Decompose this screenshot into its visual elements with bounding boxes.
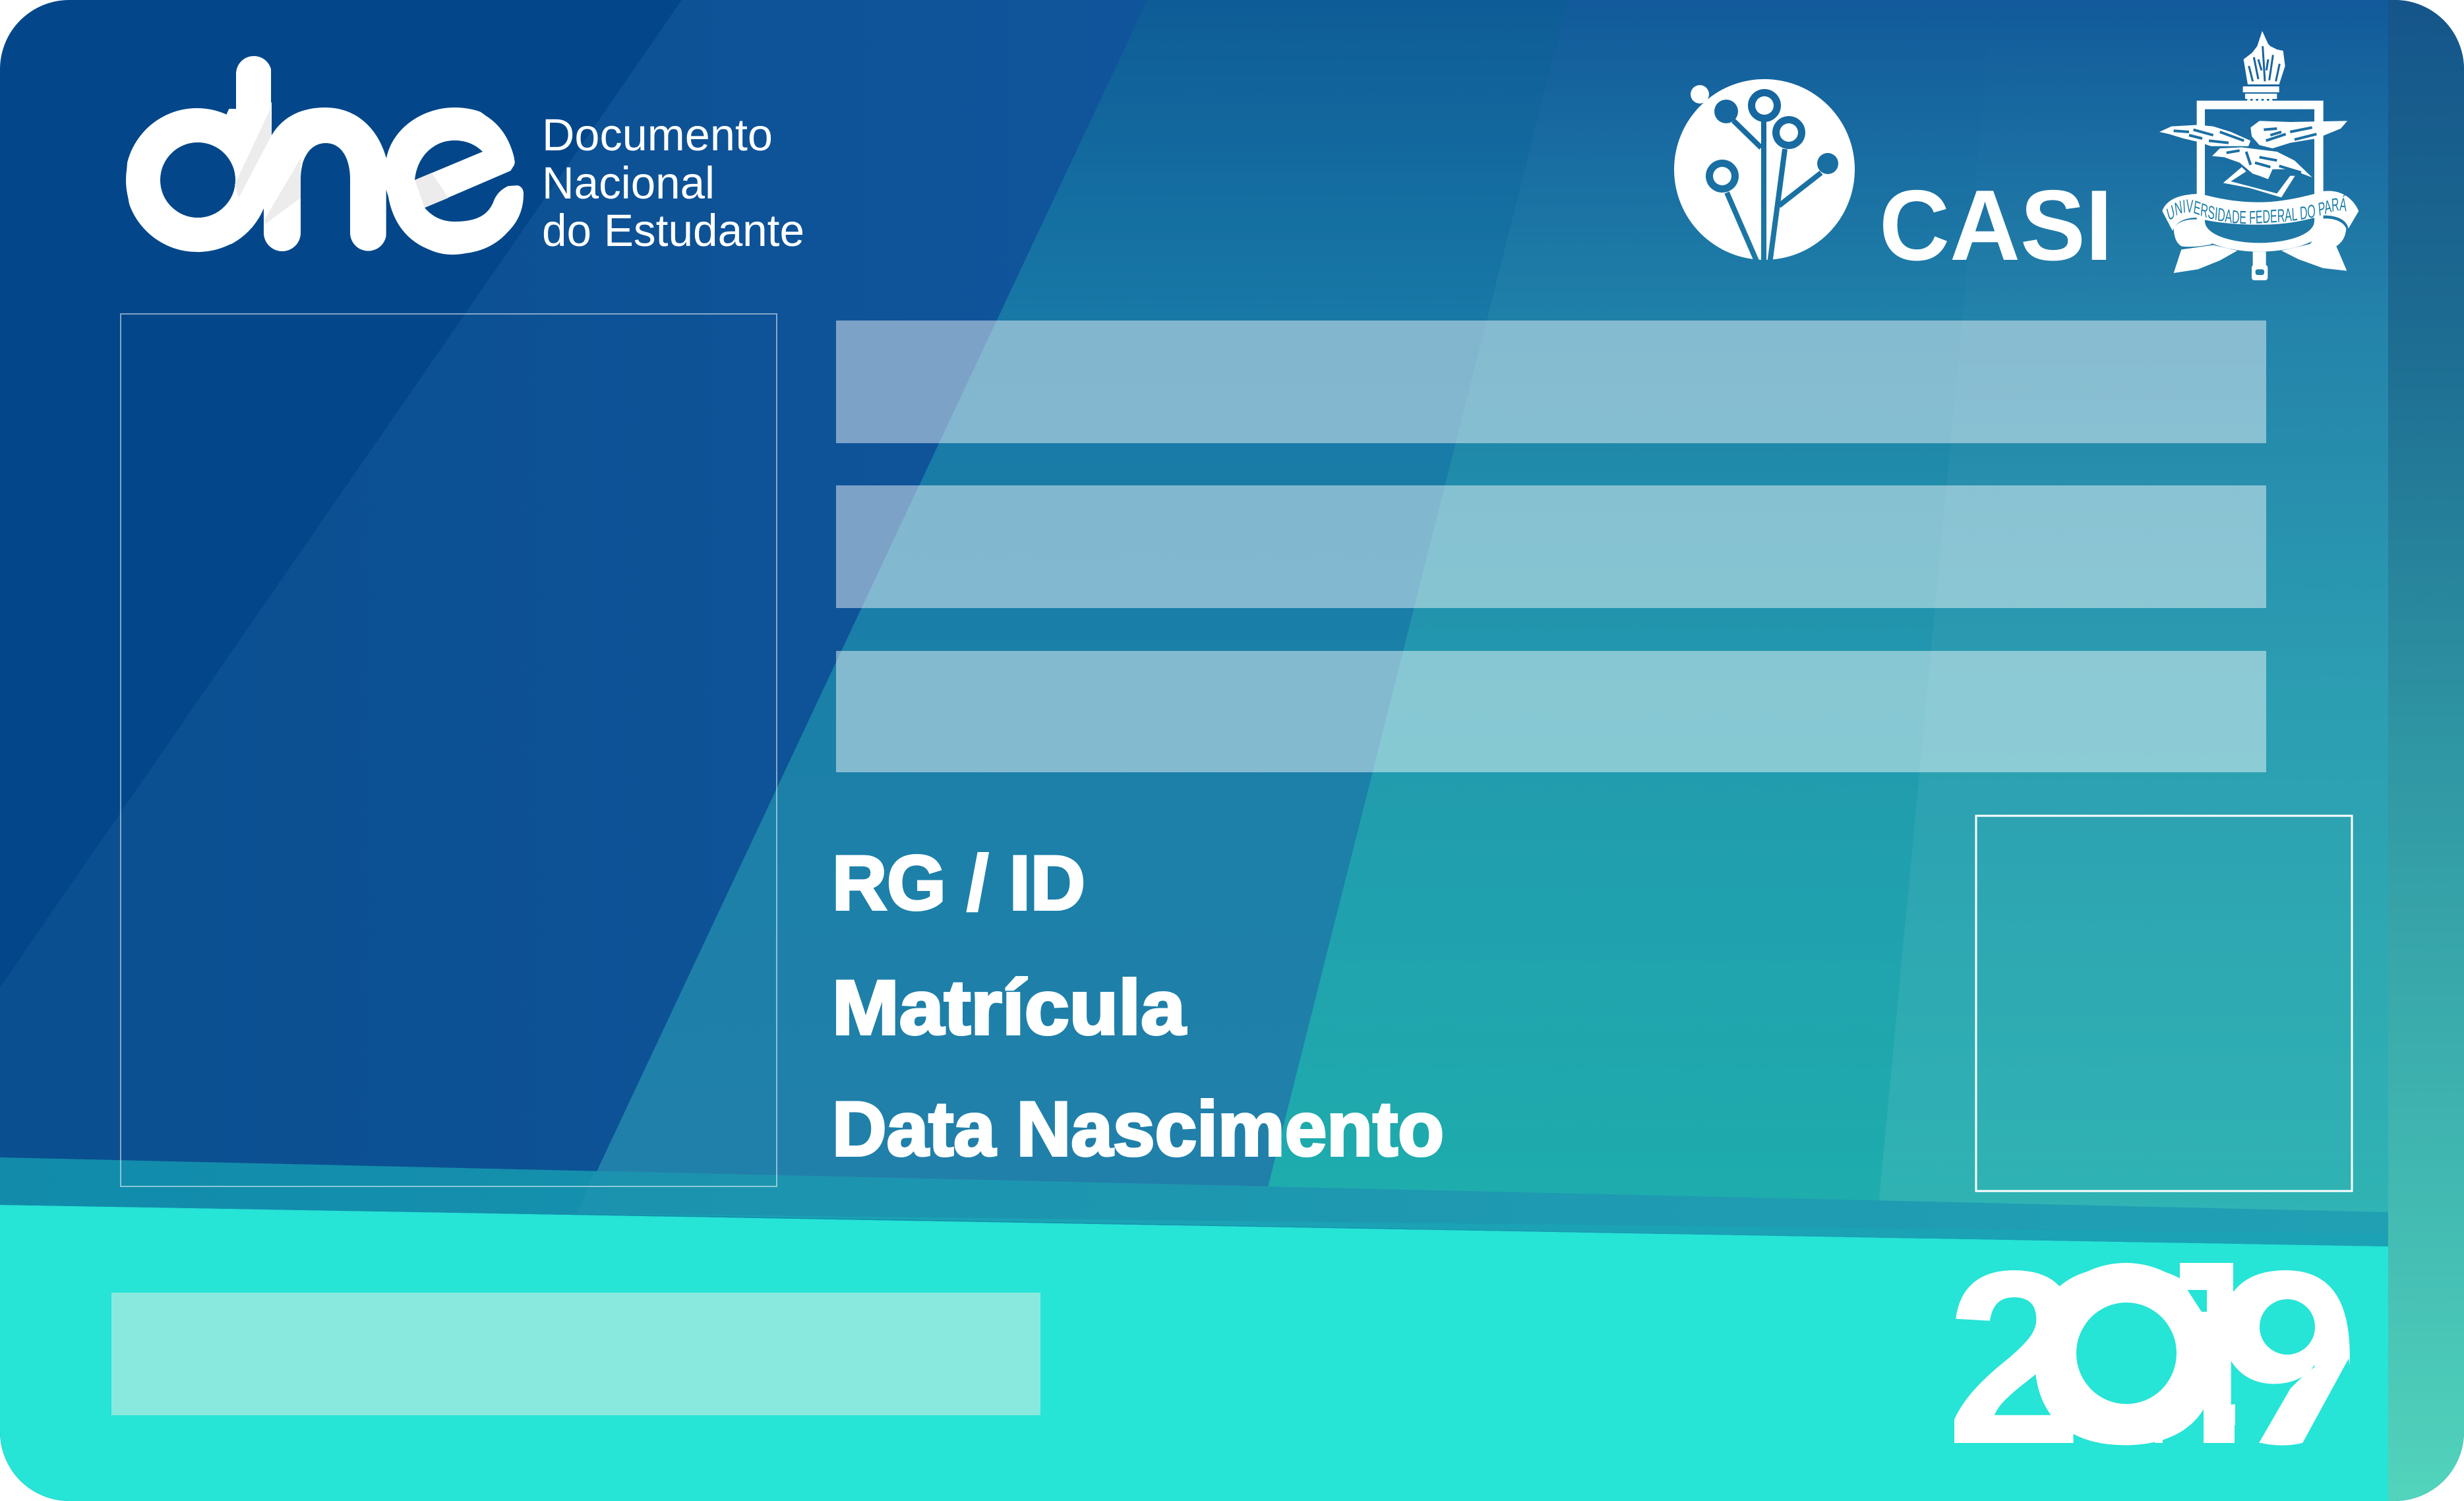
name field 3: [836, 651, 2266, 772]
year 2019: 2: [1946, 1220, 2084, 1496]
CASI wordmark: CASI: [1879, 169, 2113, 282]
year 2019: 1: [2140, 1220, 2277, 1496]
crest stem: [2252, 252, 2268, 280]
logo caption: Documento Nacional do Estudante: [542, 109, 804, 256]
label: Data Nascimento: Data Nascimento: [832, 1086, 1444, 1172]
logo caption: Documento Nacional do Estudante: Documento: [542, 109, 773, 160]
icon: UFPA crest: [2159, 31, 2359, 280]
name field 2: [836, 485, 2266, 608]
crest ribbon: [2162, 191, 2359, 231]
photo placeholder frame: [121, 314, 777, 1186]
logo: dne lettering: n: [255, 16, 394, 296]
crest torch: [2243, 31, 2285, 101]
bottom field: [111, 1293, 1040, 1415]
logo caption: Documento Nacional do Estudante: Nacional: [542, 158, 715, 208]
logo caption: Documento Nacional do Estudante: do Estudante: [542, 205, 804, 256]
panel: right side strip: [2388, 0, 2464, 1501]
crest ribbon text: UNIVERSIDADE FEDERAL DO PARÁ: [2167, 195, 2347, 224]
label: RG / ID: RG / ID: [832, 840, 1085, 926]
crest shield frame: [2197, 101, 2324, 252]
year 2019: 0: [2036, 1231, 2215, 1481]
panel: diagonal footer band: [0, 1157, 2388, 1501]
crest eagle and book: [2159, 121, 2347, 197]
year 2019: 9: [2213, 1219, 2360, 1496]
label: Matrícula: Matrícula: [832, 964, 1186, 1051]
name field 1: [836, 321, 2266, 443]
logo: dne lettering: [115, 8, 559, 313]
year 2019: [1946, 1219, 2360, 1496]
QR placeholder frame: [1976, 816, 2352, 1191]
logo: dne lettering: e: [330, 8, 559, 313]
crest scroll tails: [2174, 218, 2347, 273]
icon: CASI tree circle: [1674, 79, 1855, 260]
logo: dne lettering: d: [124, 15, 281, 295]
